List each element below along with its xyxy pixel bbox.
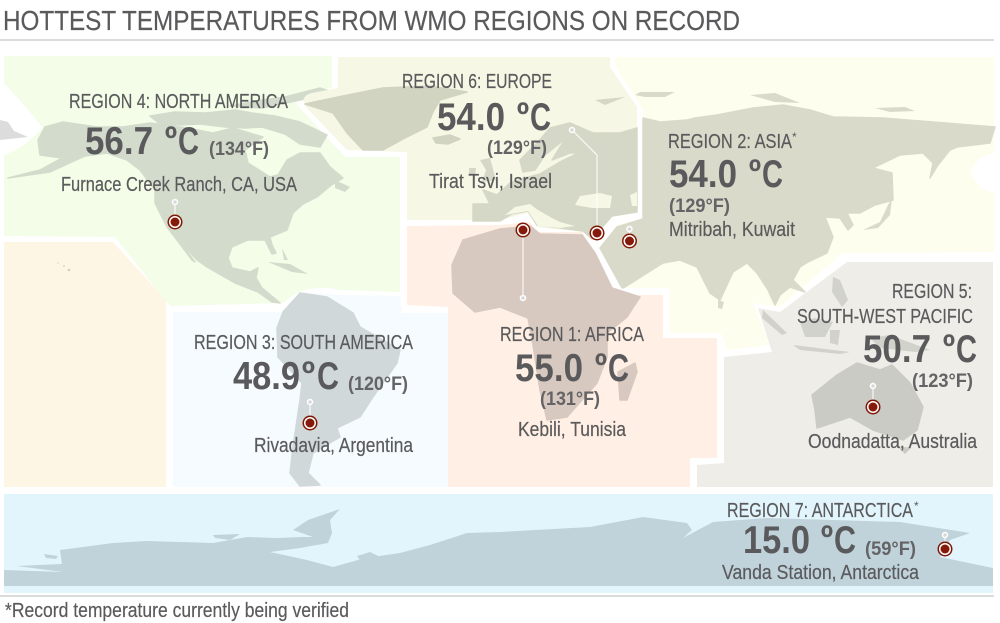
text block: region 4: REGION 4: NORTH AMERICA <box>69 90 288 113</box>
panel: region 3 South America <box>173 293 448 487</box>
text block: region 6: 54.0 <box>437 96 505 139</box>
map: Australia and Indonesia land <box>812 363 923 453</box>
text block: region 4: Furnace Creek Ranch, CA, USA <box>61 173 297 196</box>
text block: region 4: 56.7 <box>85 120 153 163</box>
text block: region 4 <box>61 90 297 196</box>
map: Asia land <box>600 105 995 305</box>
text block: region 2: o <box>749 153 761 176</box>
text block: region 5: 50.7 <box>863 328 931 371</box>
map: Antarctica land <box>4 509 993 586</box>
map: Canadian Arctic islands <box>150 88 332 147</box>
panel: region 7 Antarctica <box>4 494 993 593</box>
text block: region 3: REGION 3: SOUTH AMERICA <box>194 331 413 354</box>
pin: Furnace Creek <box>168 200 182 230</box>
text block: region 6: (129°F) <box>487 138 547 159</box>
pin: Oodnadatta <box>866 384 880 414</box>
text block: region 4: o <box>165 120 177 143</box>
map: Europe land <box>473 123 637 239</box>
text block: region 4: C <box>178 120 199 163</box>
text block: region 1: 55.0 <box>515 347 583 390</box>
panel: unnamed Pacific zone <box>4 242 166 487</box>
text block: region 5: (123°F) <box>912 371 973 392</box>
text block: region 7 <box>722 499 920 584</box>
panel: region 1 Africa <box>407 222 717 487</box>
text block: region 3: Rivadavia, Argentina <box>254 434 413 457</box>
map: Africa land <box>452 226 640 420</box>
text block: region 5 <box>797 280 978 453</box>
pin: Kebili <box>516 222 530 300</box>
text block: region 5: C <box>956 328 977 371</box>
text block: region 2: Mitribah, Kuwait <box>669 218 795 241</box>
text block: region 6: Tirat Tsvi, Israel <box>429 170 552 193</box>
title: HOTTEST TEMPERATURES FROM WMO REGIONS ON RECORD <box>3 5 740 36</box>
panel: region 4 North America <box>0 56 400 306</box>
text block: region 2: * <box>792 130 797 144</box>
text block: region 1: Kebili, Tunisia <box>518 418 627 441</box>
text block: region 3 <box>194 331 413 457</box>
panel: region 5 South-West Pacific <box>697 262 993 487</box>
map: Black Sea, Caspian and Mediterranean water <box>505 192 637 228</box>
text block: region 1 <box>500 323 644 441</box>
text block: region 6: C <box>530 96 551 139</box>
text block: region 7: 15.0 <box>743 519 810 562</box>
panel: region 2 Asia <box>600 57 995 350</box>
text block: region 6 <box>402 70 552 193</box>
text block: region 6: REGION 6: EUROPE <box>402 70 552 93</box>
text block: region 2: (129°F) <box>669 196 730 217</box>
footnote: *Record temperature currently being verified <box>5 599 349 622</box>
map: Chukotka tip <box>0 120 28 140</box>
text block: region 5: Oodnadatta, Australia <box>808 430 978 453</box>
map: Greenland and Iceland <box>305 86 467 150</box>
pin: Rivadavia <box>302 400 318 430</box>
text block: region 7: o <box>821 519 833 542</box>
text block: region 2: 54.0 <box>669 153 737 196</box>
text block: region 7: Vanda Station, Antarctica <box>722 561 920 584</box>
pin: Mitribah <box>622 226 637 248</box>
text block: region 3: C <box>317 355 339 398</box>
text block: region 3: o <box>302 355 315 378</box>
text block: region 2: C <box>762 153 783 196</box>
text block: region 3: (120°F) <box>348 374 408 395</box>
text block: region 6: o <box>517 96 529 119</box>
text block: region 7: C <box>834 519 856 562</box>
text block: region 4: (134°F) <box>209 139 269 160</box>
map: South America land <box>277 293 400 486</box>
text block: region 2 <box>668 130 797 241</box>
text block: region 1: o <box>595 347 607 370</box>
text block: region 1: C <box>608 347 629 390</box>
text block: region 5: o <box>943 328 955 351</box>
text block: region 2: REGION 2: ASIA <box>668 130 792 153</box>
text block: region 5: REGION 5: <box>892 280 972 303</box>
text block: region 3: 48.9 <box>233 355 300 398</box>
panel: region 6 Europe <box>304 57 637 240</box>
pin: Tirat Tsvi <box>570 128 604 240</box>
pin: Vanda Station <box>938 532 952 556</box>
text block: region 7: (59°F) <box>865 539 916 560</box>
text block: region 1: REGION 1: AFRICA <box>500 323 644 346</box>
text block: region 7: REGION 7: ANTARCTICA <box>727 499 913 522</box>
map: North America land <box>8 122 343 303</box>
text block: region 1: (131°F) <box>540 389 600 410</box>
text block: region 7: * <box>914 499 919 513</box>
